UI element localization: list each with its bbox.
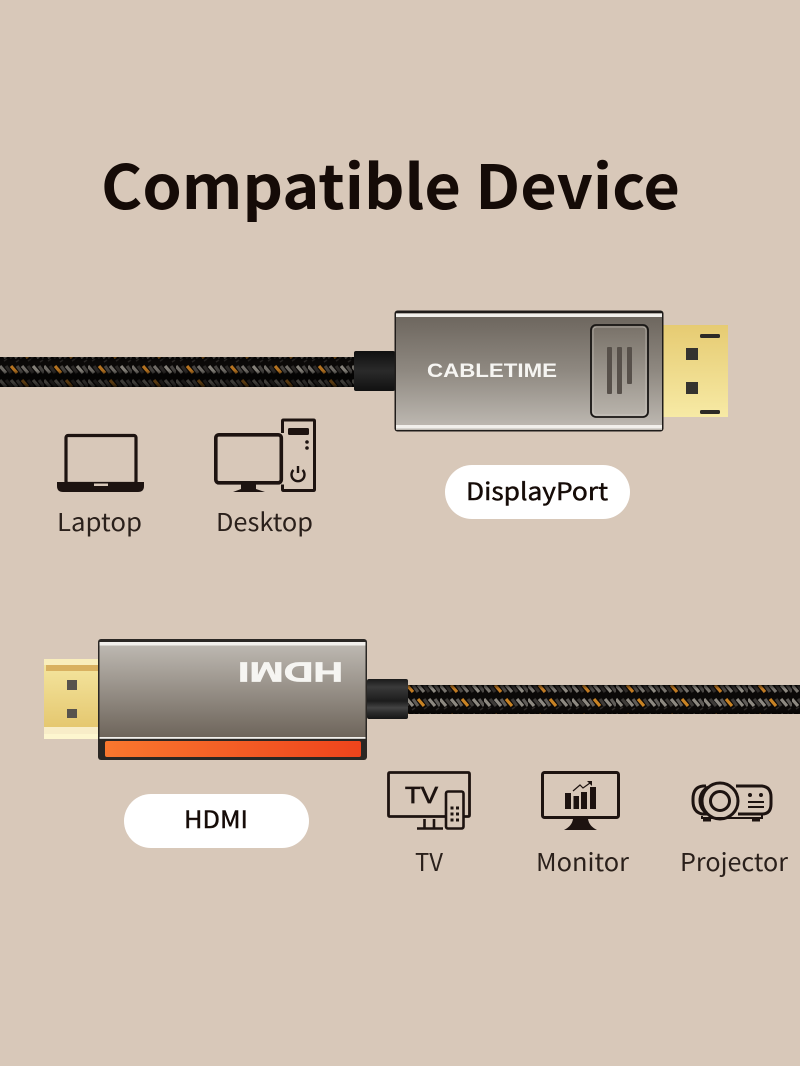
HDMI label pill [124, 794, 309, 848]
label: monitor: Monitor [536, 844, 630, 879]
metal housing [98, 639, 367, 760]
icon: projector [693, 783, 771, 820]
DisplayPort cable [0, 357, 356, 387]
gold plug [44, 659, 99, 739]
HDMI cable [406, 685, 800, 714]
gold plug [663, 325, 728, 417]
label: TV: TV [415, 844, 444, 879]
orange stripe [105, 741, 361, 757]
HDMI logo (upside down): HDMI [238, 656, 343, 688]
brand name: CABLETIME [427, 360, 557, 382]
strain relief [354, 351, 395, 391]
HDMI label pill: HDMI [184, 800, 248, 835]
HDMI connector [44, 639, 408, 760]
title: Compatible Device [101, 138, 680, 227]
icon: TV [388, 772, 470, 828]
DisplayPort label pill [445, 465, 630, 519]
icon: desktop [216, 420, 314, 492]
label: projector: Projector [680, 844, 788, 879]
strain relief [367, 679, 408, 719]
DisplayPort connector [354, 310, 728, 432]
label: laptop: Laptop [57, 504, 142, 539]
label: desktop: Desktop [216, 504, 313, 539]
icon: laptop [57, 436, 144, 492]
DisplayPort label pill: DisplayPort [466, 472, 608, 507]
icon: monitor [542, 772, 618, 830]
icon: TV: TV [405, 782, 439, 808]
metal housing [394, 310, 664, 432]
latch button [591, 325, 648, 417]
